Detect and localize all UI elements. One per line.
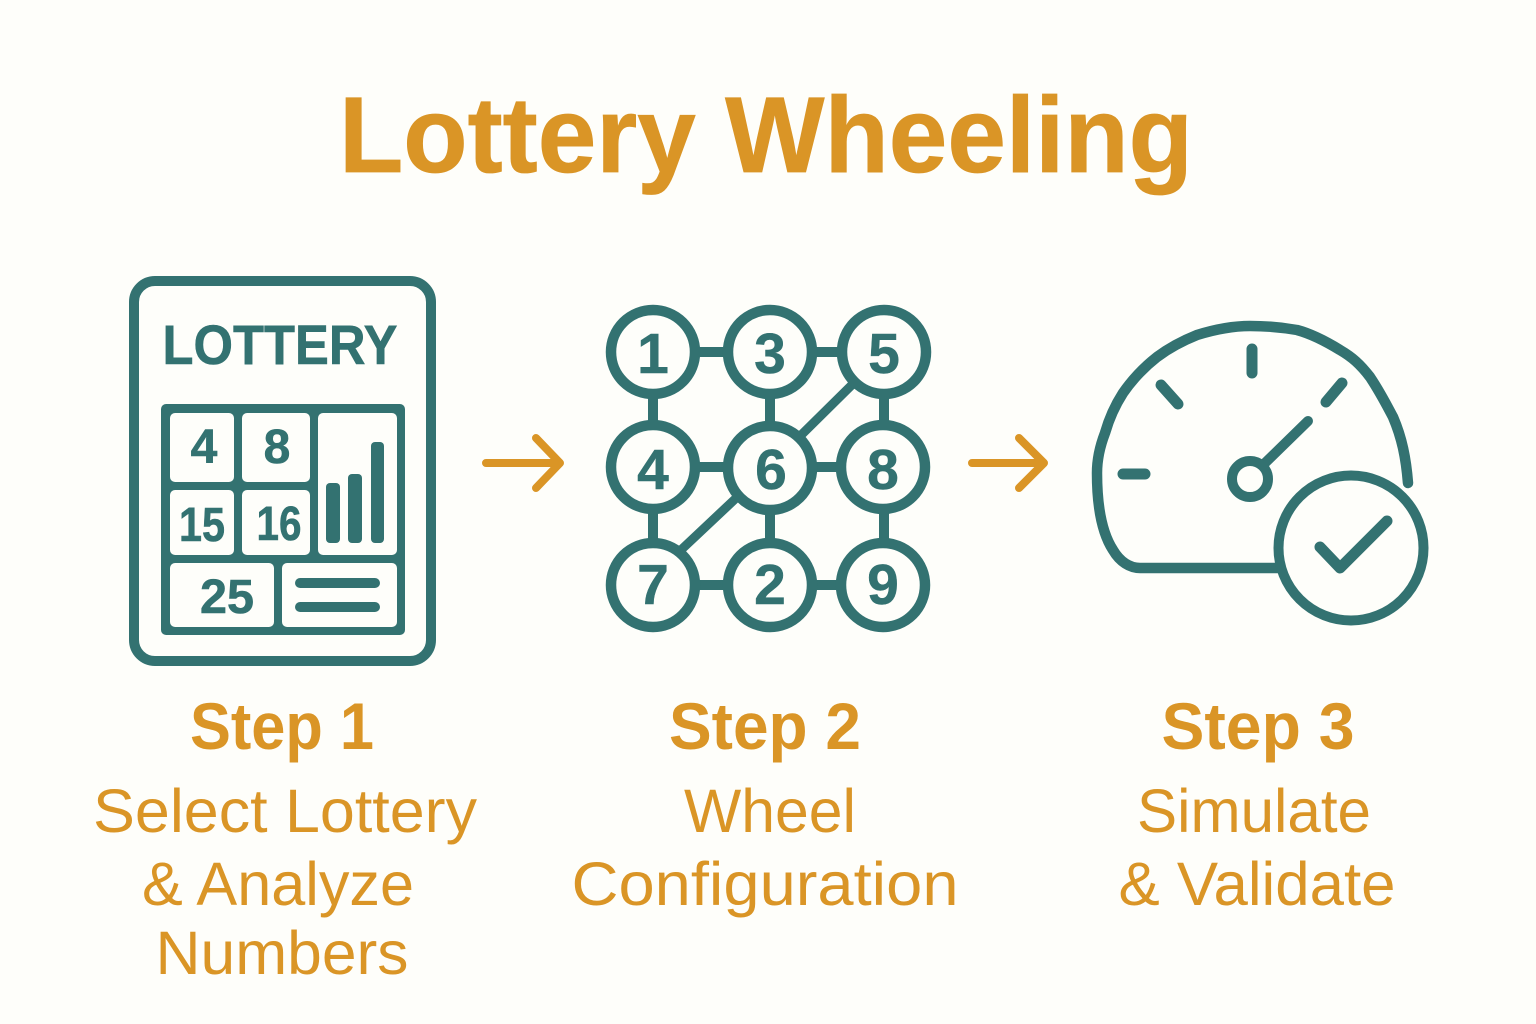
icon: lottery ticket: 16 (256, 498, 302, 551)
title: Lottery Wheeling (339, 74, 1193, 195)
step 3 text (1118, 689, 1396, 918)
step 3 text: Step 3 (1162, 689, 1354, 763)
icon: number wheel grid: 6 (755, 438, 787, 502)
step 1 text: Step 1 (190, 689, 374, 763)
icon: number wheel grid: 2 (754, 553, 786, 617)
step 1 text: Numbers (156, 919, 408, 987)
icon: number wheel grid: 5 (868, 322, 900, 386)
step 1 text: Select Lottery (93, 777, 477, 845)
step 1 text: & Analyze (142, 850, 414, 918)
icon: lottery ticket: 8 (264, 421, 290, 474)
icon: number wheel grid: 4 (637, 438, 669, 502)
icon: gauge with check (1097, 326, 1424, 620)
step 3 text: & Validate (1118, 850, 1396, 918)
step 2 text (572, 689, 958, 918)
step 2 text: Wheel (684, 777, 856, 845)
step 2 text: Step 2 (669, 689, 861, 763)
step 2 text: Configuration (572, 850, 958, 918)
icon: number wheel grid: 3 (754, 322, 786, 386)
icon: number wheel grid: 7 (637, 553, 669, 617)
step 3 text: Simulate (1137, 777, 1371, 845)
step 1 text (93, 689, 477, 987)
icon: lottery ticket: 25 (200, 571, 254, 624)
icon: number wheel grid: 9 (867, 553, 899, 617)
icon: lottery ticket: LOTTERY (162, 313, 398, 376)
icon: number wheel grid: 8 (867, 438, 899, 502)
icon: lottery ticket: 15 (179, 499, 225, 552)
arrow: step 1 to step 2 (486, 438, 560, 488)
arrow: step 2 to step 3 (972, 438, 1044, 488)
icon: number wheel grid (611, 310, 926, 627)
icon: number wheel grid: 1 (637, 322, 669, 386)
icon: lottery ticket (134, 281, 431, 661)
icon: lottery ticket: 4 (191, 421, 218, 474)
